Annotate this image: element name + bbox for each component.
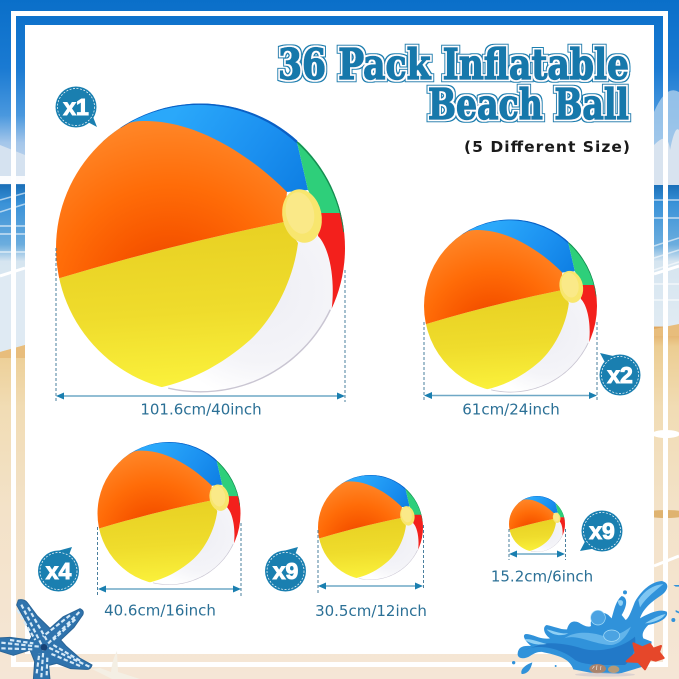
icon: shell sprig bbox=[92, 651, 140, 679]
subtitle: (5 Different Size) bbox=[464, 138, 630, 156]
badge: x1 bbox=[56, 86, 97, 128]
badge: x9 right: x9 bbox=[589, 518, 615, 544]
badge: x9 left bbox=[265, 547, 306, 592]
title: Beach Ball bbox=[428, 80, 629, 129]
icon: blue starfish bbox=[0, 600, 92, 679]
badge: x4: x4 bbox=[46, 558, 71, 584]
title bbox=[278, 40, 629, 129]
badge: x9 left: x9 bbox=[273, 558, 298, 584]
size label: 16 inch: 40.6cm/16inch bbox=[104, 602, 216, 620]
size label: 12 inch: 30.5cm/12inch bbox=[315, 602, 427, 620]
badge: x2: x2 bbox=[607, 362, 633, 388]
badge: x2 bbox=[600, 353, 640, 396]
size label: 40 inch: 101.6cm/40inch bbox=[140, 400, 262, 418]
size label: 24 inch: 61cm/24inch bbox=[462, 400, 560, 418]
beach ball: 12 inch bbox=[312, 474, 428, 593]
badge: x9 right bbox=[580, 510, 622, 552]
icon: water splash bbox=[512, 581, 679, 677]
beach ball: 6 inch bbox=[506, 495, 568, 560]
beach ball: 24 inch bbox=[414, 217, 606, 403]
size label: 6 inch: 15.2cm/6inch bbox=[491, 568, 593, 586]
beach ball: 16 inch bbox=[90, 440, 248, 597]
beach ball: 40 inch bbox=[40, 100, 360, 410]
badge: x1: x1 bbox=[63, 94, 89, 120]
badge: x4 bbox=[38, 547, 79, 592]
